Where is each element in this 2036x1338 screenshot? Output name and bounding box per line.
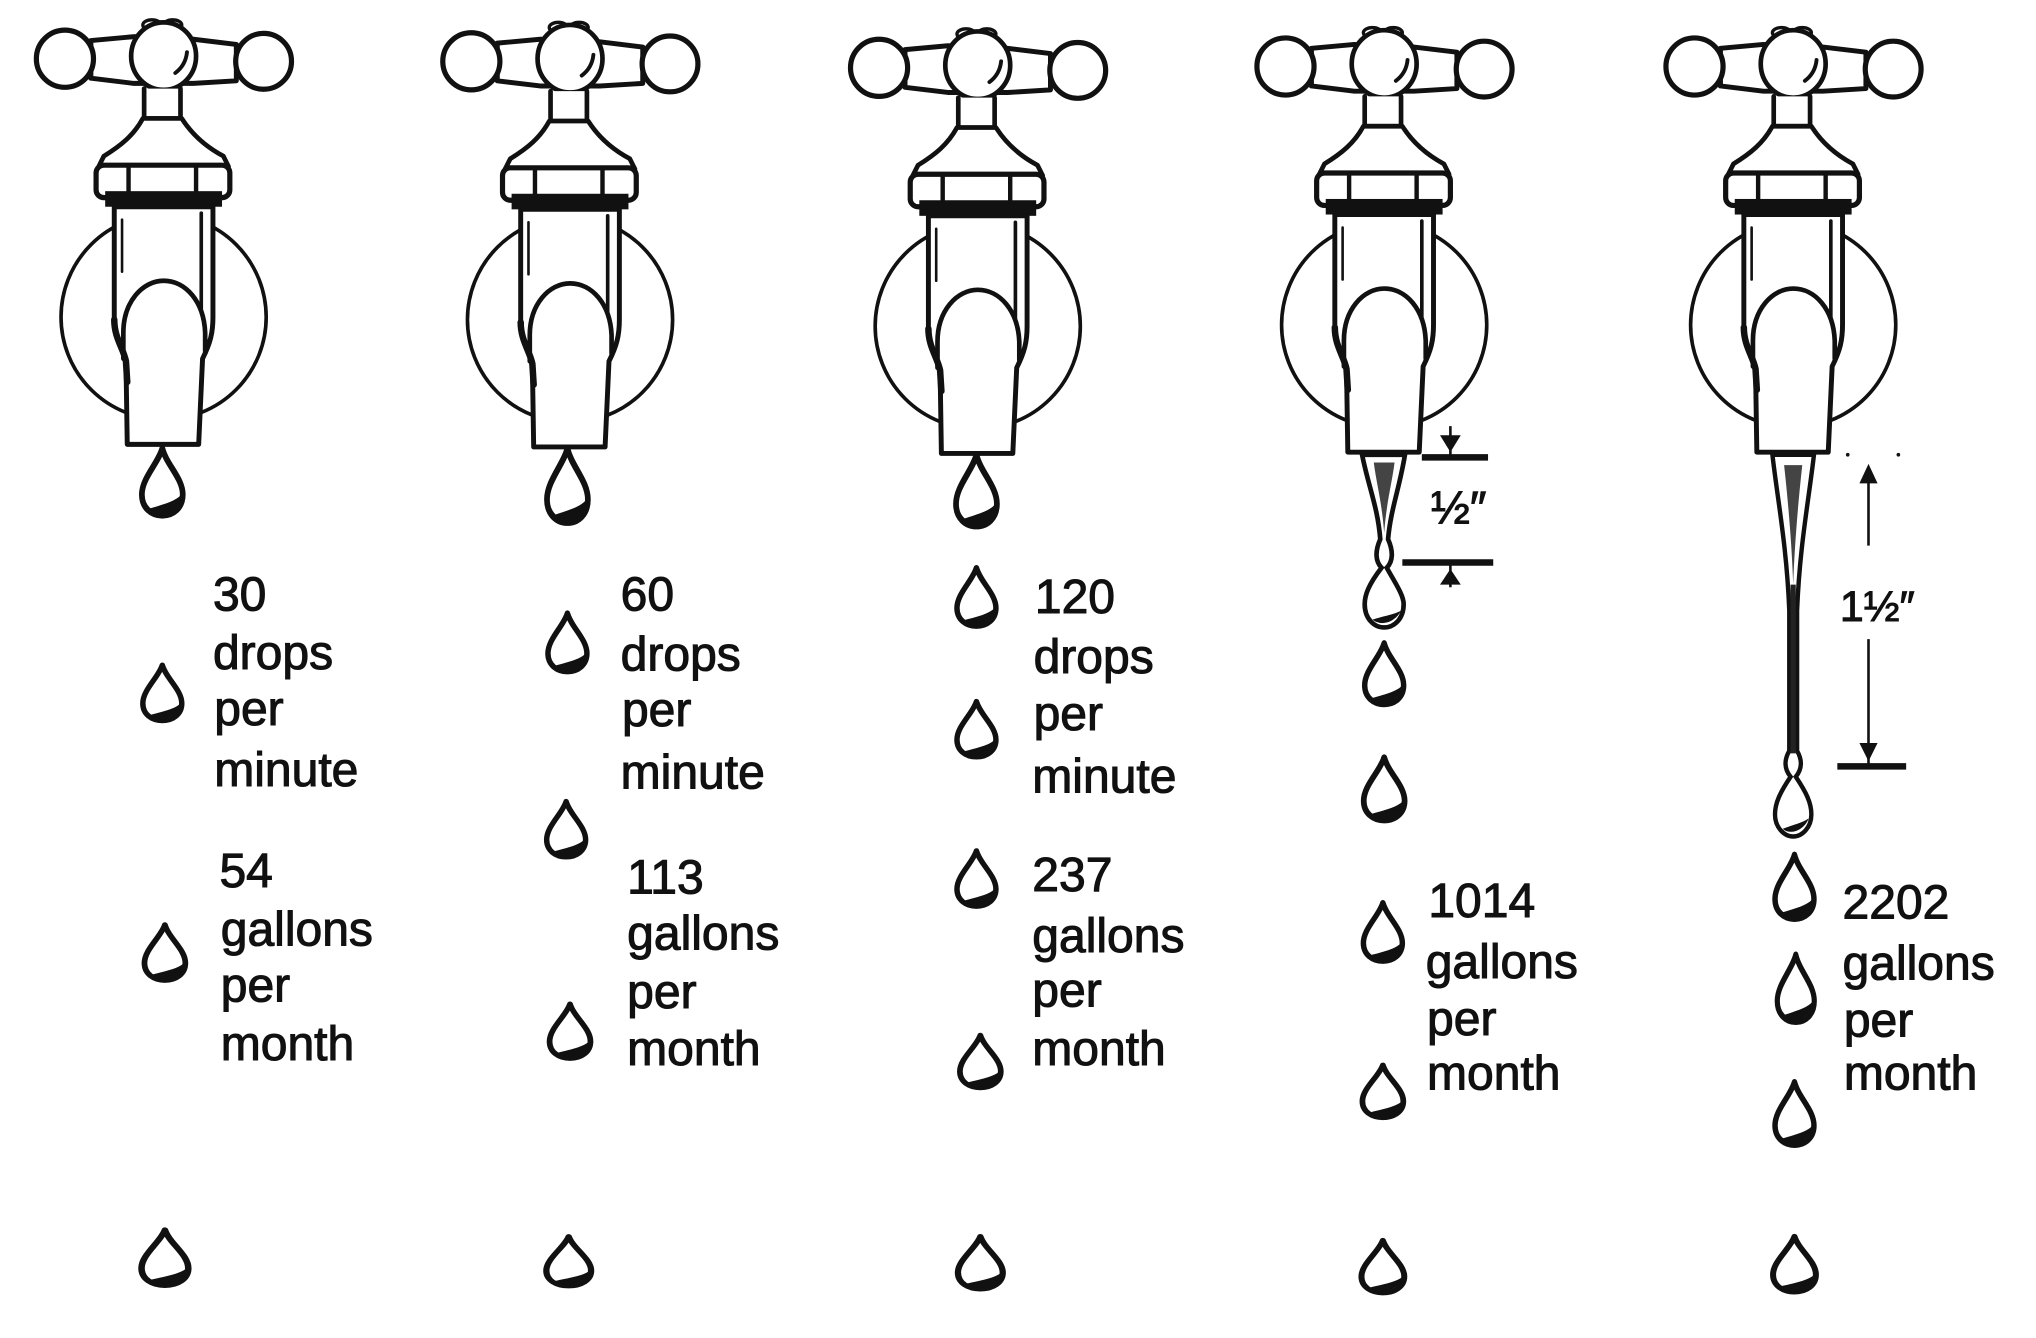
- text: monthly loss 113: per: [627, 966, 697, 1019]
- icon: falling drop 5-4: [1773, 1236, 1816, 1292]
- icon: falling drop 4-2: [1364, 757, 1405, 820]
- text: monthly loss 237: gallons: [1032, 910, 1185, 963]
- text: monthly loss 1014: per: [1427, 993, 1496, 1046]
- text: drip rate 30: [213, 569, 358, 797]
- text: monthly loss 2202: 2202: [1843, 876, 1949, 929]
- icon: falling drop 3-4: [960, 1035, 1001, 1088]
- icon: faucet 3: [850, 29, 1106, 453]
- icon: falling drop 5-1: [1775, 855, 1814, 919]
- icon: falling drop 3-3: [957, 851, 996, 906]
- text: monthly loss 2202: per: [1844, 994, 1913, 1047]
- text: drip rate 60: 60: [621, 569, 674, 622]
- icon: drop leaving faucet 2: [547, 448, 588, 522]
- text: monthly loss 237: 237: [1032, 849, 1112, 902]
- icon: falling drop 1-2: [144, 925, 185, 980]
- text: drip rate 30: minute: [214, 744, 358, 797]
- icon: falling drop 5-2: [1777, 955, 1814, 1022]
- icon: falling drop 3-2: [957, 701, 996, 757]
- text: monthly loss 113: [627, 852, 779, 1076]
- text: drip rate 120: minute: [1032, 750, 1176, 803]
- text: monthly loss 1014: gallons: [1426, 936, 1578, 989]
- text: monthly loss 113: 113: [627, 852, 704, 905]
- text: monthly loss 1014: [1426, 875, 1578, 1101]
- panel: half-inch stream: [1257, 28, 1578, 1293]
- text: drip rate 60: minute: [621, 746, 765, 799]
- icon: falling drop 2-4: [546, 1236, 591, 1286]
- text: drip rate 30: 30: [213, 569, 266, 622]
- text: drip rate 120: drops: [1034, 631, 1154, 684]
- icon: falling drop 2-2: [547, 801, 586, 857]
- text: monthly loss 237: [1032, 849, 1185, 1076]
- icon: half-inch water stream: [1362, 455, 1405, 627]
- text: drip rate 30: drops: [213, 627, 333, 680]
- icon: falling drop 3-1: [957, 568, 996, 626]
- text: monthly loss 54: month: [221, 1018, 354, 1071]
- text: drip rate 60: per: [622, 684, 691, 737]
- icon: falling drop 2-3: [550, 1004, 590, 1058]
- text: monthly loss 1014: 1014: [1428, 875, 1535, 928]
- dimension: one and one-half inch: 1½″: [1840, 583, 1915, 631]
- icon: falling drop 1-1: [143, 665, 182, 721]
- text: drip rate 120: 120: [1035, 571, 1115, 624]
- dimension: one-half inch: [1402, 426, 1493, 587]
- panel: inch-and-a-half stream: [1666, 28, 1995, 1292]
- dimension: one-half inch: ½″: [1431, 482, 1486, 534]
- icon: falling drop 4-5: [1361, 1240, 1404, 1293]
- icon: faucet 5: [1666, 28, 1921, 452]
- panel: 30 drops per minute: [36, 20, 373, 1285]
- icon: faucet 4: [1257, 28, 1512, 452]
- icon: falling drop 5-3: [1775, 1082, 1814, 1145]
- icon: inch-and-a-half water stream: [1772, 455, 1814, 837]
- dimension: one and one-half inch: [1837, 453, 1915, 766]
- text: monthly loss 113: month: [627, 1023, 761, 1076]
- icon: falling drop 1-3: [142, 1230, 188, 1285]
- icon: falling drop 4-4: [1362, 1065, 1403, 1118]
- icon: faucet 1: [36, 20, 292, 444]
- text: monthly loss 237: month: [1032, 1023, 1166, 1076]
- text: drip rate 30: per: [214, 683, 284, 736]
- icon: falling drop 3-5: [958, 1236, 1003, 1289]
- text: monthly loss 1014: month: [1427, 1048, 1561, 1101]
- text: monthly loss 2202: [1843, 876, 1995, 1101]
- text: monthly loss 2202: gallons: [1843, 937, 1995, 990]
- text: monthly loss 237: per: [1032, 965, 1102, 1018]
- icon: falling drop 4-1: [1365, 643, 1404, 704]
- panel: 60 drops per minute: [443, 22, 779, 1286]
- text: monthly loss 54: per: [221, 959, 290, 1012]
- text: drip rate 60: drops: [621, 628, 741, 681]
- text: monthly loss 2202: month: [1844, 1048, 1977, 1101]
- text: monthly loss 113: gallons: [627, 907, 779, 960]
- text: monthly loss 54: 54: [219, 845, 273, 898]
- text: monthly loss 54: [219, 845, 373, 1071]
- icon: drop leaving faucet 1: [142, 448, 183, 515]
- text: drip rate 60: [621, 569, 765, 799]
- icon: falling drop 2-1: [548, 613, 587, 672]
- text: monthly loss 54: gallons: [221, 904, 373, 957]
- panel: 120 drops per minute: [850, 29, 1185, 1289]
- icon: faucet 2: [443, 22, 698, 447]
- text: drip rate 120: [1032, 571, 1176, 803]
- icon: falling drop 4-3: [1363, 903, 1402, 961]
- icon: drop leaving faucet 3: [956, 455, 997, 526]
- text: drip rate 120: per: [1034, 688, 1103, 741]
